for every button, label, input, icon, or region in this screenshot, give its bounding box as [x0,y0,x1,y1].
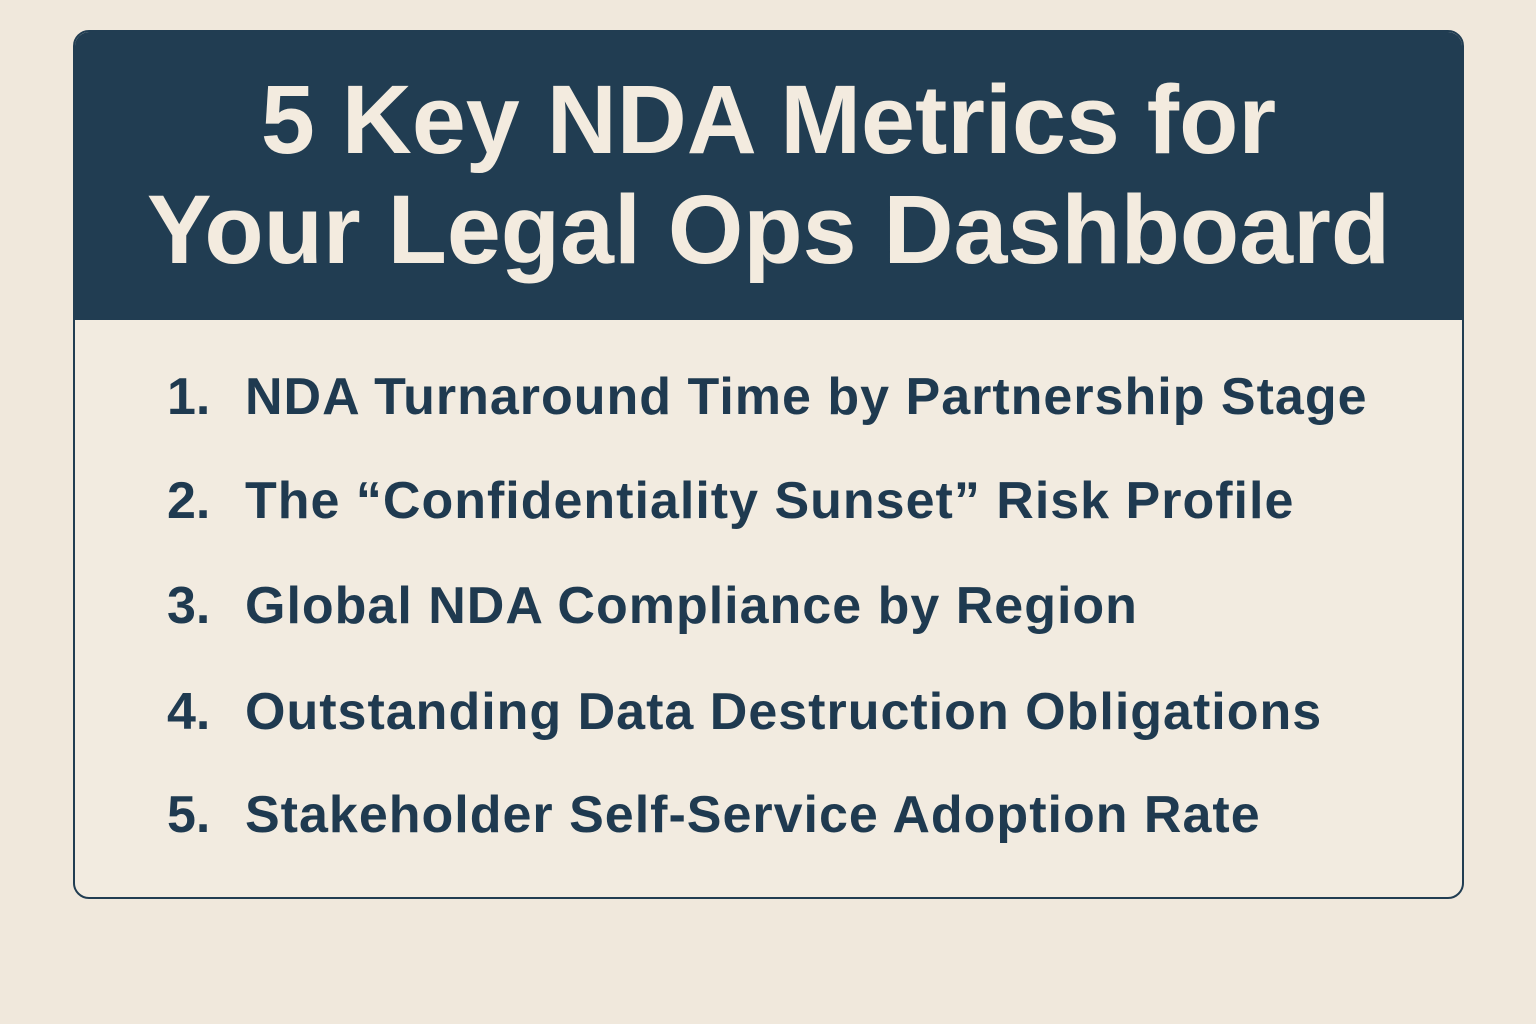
title: 5 Key NDA Metrics for [261,65,1276,174]
list item 4: 4. [167,683,210,741]
list item 4: Outstanding Data Destruction Obligations [245,683,1322,741]
list item 2: The “Confidentiality Sunset” Risk Profile [245,472,1294,530]
list item 1: 1. [167,368,210,426]
list item 3: Global NDA Compliance by Region [245,577,1138,635]
title [147,65,1390,284]
panel: main card [73,30,1464,899]
list item 3: 3. [167,577,210,635]
list item 2: 2. [167,472,210,530]
list item 5: Stakeholder Self-Service Adoption Rate [245,786,1261,844]
list item 5: 5. [167,786,210,844]
title: Your Legal Ops Dashboard [147,175,1390,284]
list item 1: NDA Turnaround Time by Partnership Stage [245,368,1368,426]
header band [75,32,1462,320]
